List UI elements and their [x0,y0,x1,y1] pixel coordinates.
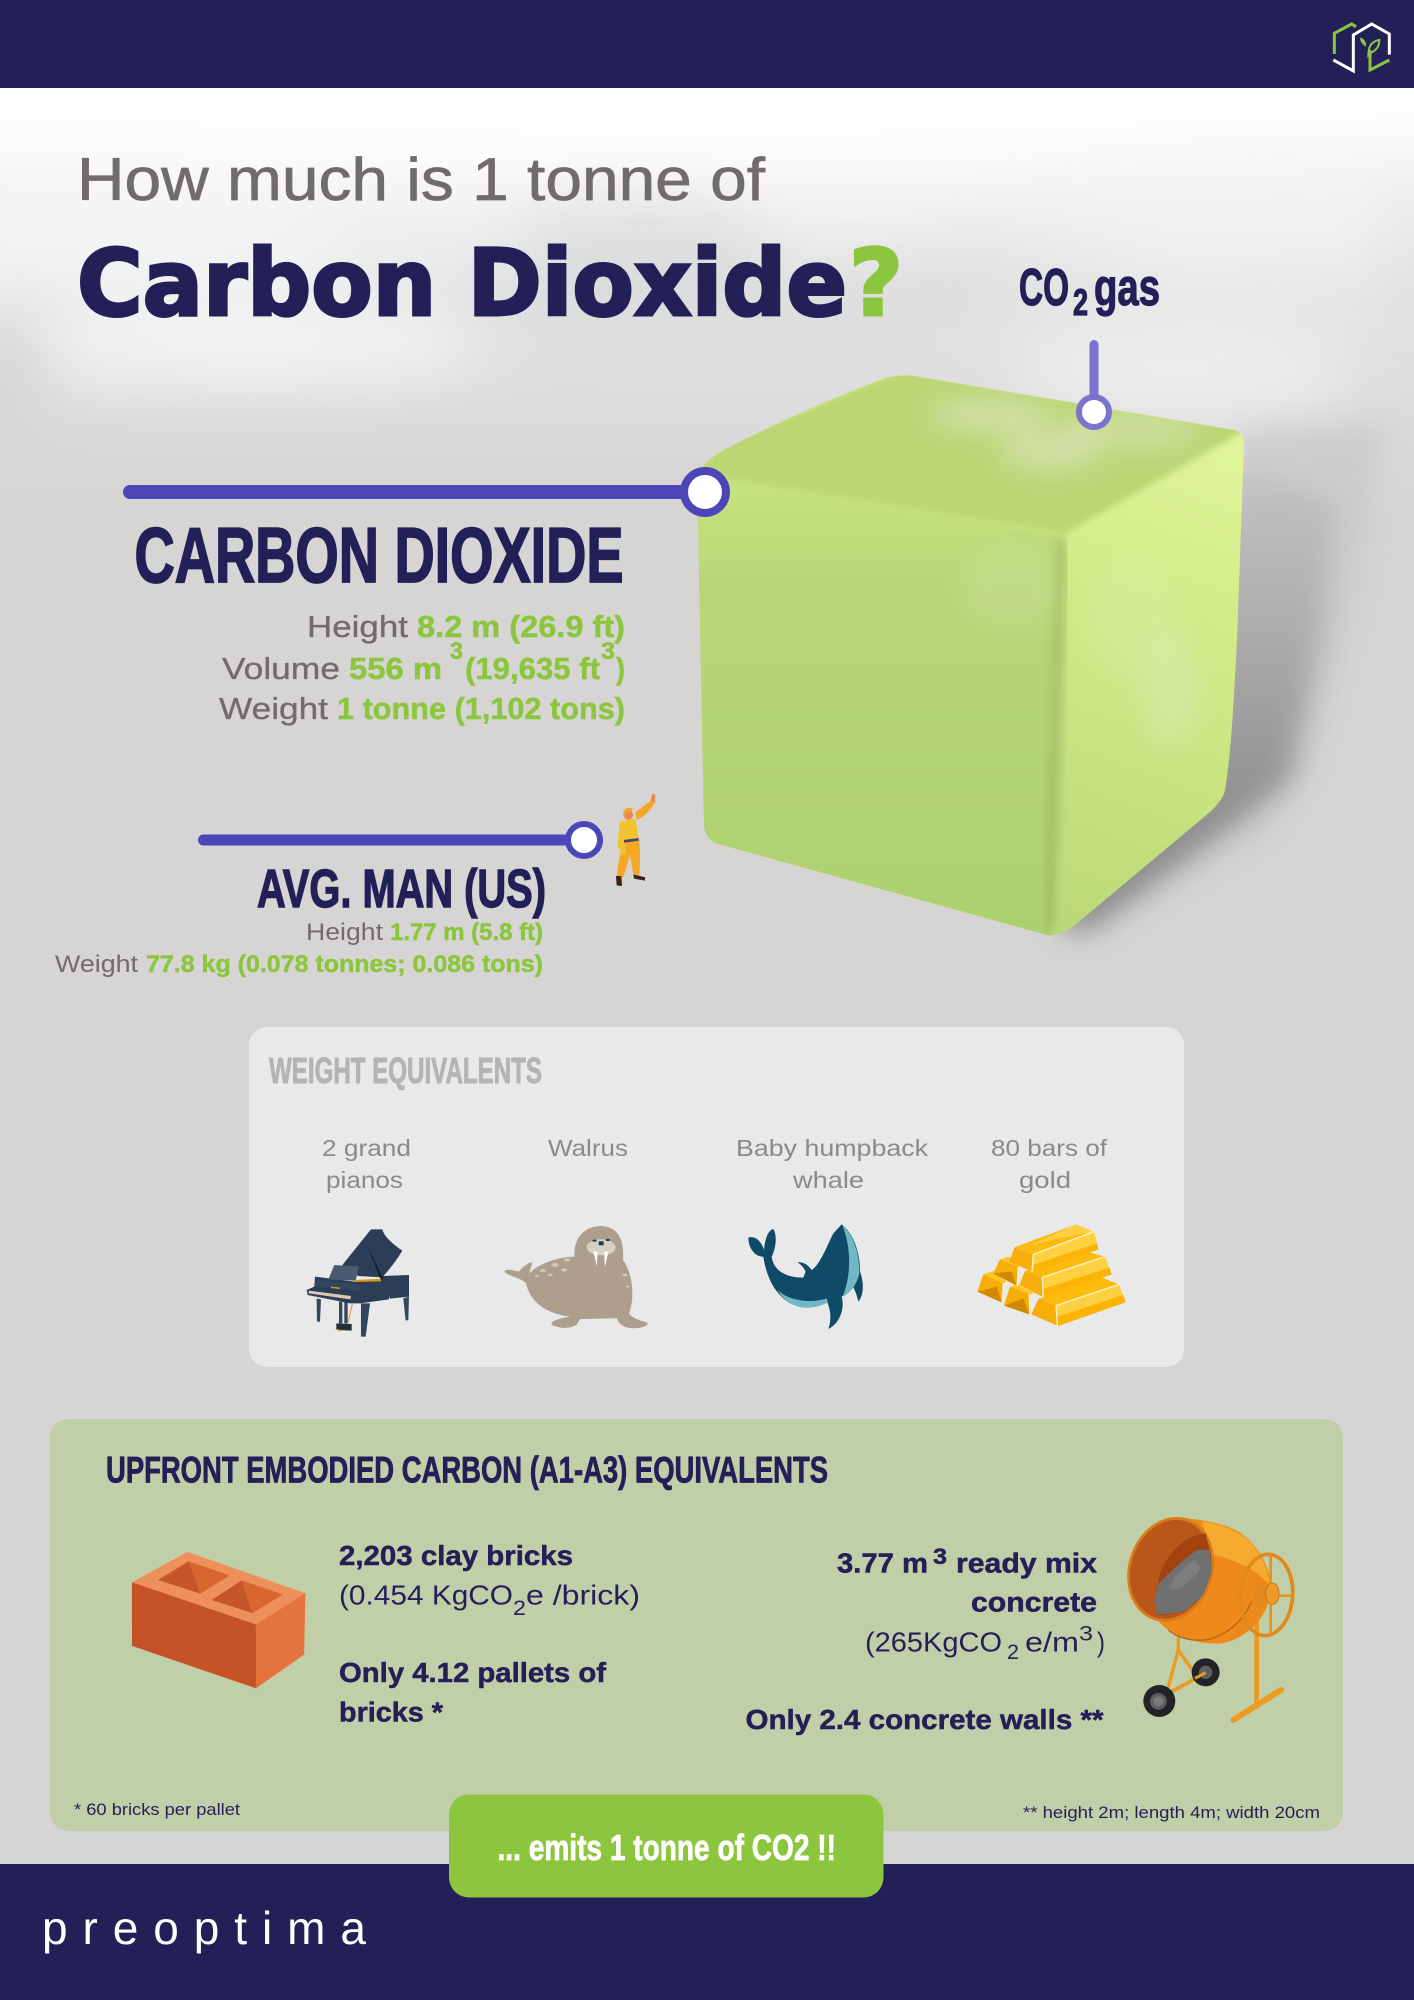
text: clay bricks: 2,203 clay bricks [339,1540,573,1571]
carbon dioxide statistics: 3 [450,638,463,665]
pointer: CO2 gas [1079,340,1109,427]
label: 80 bars of gold: gold [1019,1167,1071,1193]
cube shadow [1060,425,1385,935]
label: CO2 gas: CO [1019,259,1069,317]
cube: front edge [1048,540,1063,930]
top header bar [0,0,1414,88]
text: ready mix concrete: 2 [1007,1641,1019,1664]
pointer: average man height [198,824,600,856]
label: 80 bars of gold [991,1135,1108,1193]
text: ready mix concrete: 3 [933,1544,947,1569]
text: clay bricks [339,1540,640,1728]
text: clay bricks: 2 [513,1597,526,1620]
carbon dioxide statistics: 556 m [349,651,442,686]
panel: upfront embodied carbon equivalents [50,1419,1343,1831]
label: CO2 gas: gas [1094,259,1160,317]
text: clay bricks: e /brick) [526,1580,640,1610]
footnote: wall dimensions: ** height 2m; length 4m; width 20cm [1023,1803,1320,1822]
icon: concrete mixer [1114,1506,1295,1720]
text: ready mix concrete: 3.77 m [837,1548,928,1578]
label: walrus: Walrus [548,1135,628,1161]
footer bar [0,1864,1414,2000]
logo: preoptima wordmark: preoptima [42,1902,366,1954]
average man statistics: 77.8 kg (0.078 tonnes; 0.086 tons) [146,951,543,978]
carbon dioxide statistics: (19,635 ft [465,651,600,686]
carbon dioxide statistics: ) [616,651,625,686]
text: ready mix concrete: ready mix [956,1548,1097,1578]
text: ready mix concrete [746,1544,1105,1735]
label: 2 grand pianos: 2 grand [322,1135,411,1161]
average man statistics: 1.77 m (5.8 ft) [390,919,543,946]
text: ready mix concrete: 3 [1079,1622,1093,1646]
carbon dioxide statistics: Weight [219,691,328,726]
title: How much is 1 tonne of [77,146,765,213]
heading: upfront embodied carbon: UPFRONT EMBODIED CARBON (A1-A3) EQUIVALENTS [106,1450,828,1490]
icon: preoptima logo mark [1333,24,1389,71]
cube: top face [690,370,1250,534]
text: clay bricks: bricks * [339,1696,443,1728]
text: clay bricks: (0.454 KgCO [339,1580,513,1610]
heading: weight equivalents: WEIGHT EQUIVALENTS [269,1050,542,1091]
label: baby humpback whale [736,1135,929,1193]
label: 80 bars of gold: 80 bars of [991,1135,1108,1161]
pointer: carbon dioxide height [123,471,726,513]
label: CO2 gas [1019,259,1160,323]
label: 2 grand pianos: pianos [326,1167,403,1193]
cube: left face [690,472,1064,950]
average man statistics [55,919,543,978]
label: baby humpback whale: whale [792,1167,864,1193]
text: clay bricks: Only 4.12 pallets of [339,1657,607,1688]
icon: gold bars [977,1224,1126,1326]
text: ready mix concrete: Only 2.4 concrete walls ** [746,1704,1104,1735]
label: baby humpback whale: Baby humpback [736,1135,929,1161]
callout: emits 1 tonne of CO2 [449,1794,884,1898]
heading: CARBON DIOXIDE: CARBON DIOXIDE [134,511,624,599]
carbon dioxide statistics: 1 tonne (1,102 tons) [337,691,625,726]
cube: smoke highlights [930,399,1200,750]
title: Carbon Dioxide [77,230,847,337]
heading: AVG. MAN (US): AVG. MAN (US) [257,859,546,919]
carbon dioxide statistics [219,609,625,726]
icon: clay brick [132,1552,305,1688]
text: ready mix concrete: e/m [1025,1626,1079,1658]
carbon dioxide statistics: 3 [601,638,615,665]
icon: man [616,794,655,886]
CO2 cube [698,375,1244,936]
icon: grand piano [307,1229,409,1337]
average man statistics: Weight [55,951,138,978]
title: ? [849,230,903,337]
carbon dioxide statistics: Height [307,609,408,644]
carbon dioxide statistics: 8.2 m (26.9 ft) [417,609,625,644]
text: ready mix concrete: concrete [971,1586,1097,1618]
panel: weight equivalents [249,1027,1184,1367]
label: 2 grand pianos [322,1135,411,1193]
text: ready mix concrete: (265KgCO [865,1626,1002,1658]
average man statistics: Height [306,919,383,946]
text: ready mix concrete: ) [1097,1626,1105,1658]
icon: humpback whale [748,1224,863,1329]
footnote: bricks per pallet: * 60 bricks per pallet [74,1800,240,1819]
label: CO2 gas: 2 [1073,282,1088,323]
title [77,146,903,337]
carbon dioxide statistics: Volume [222,651,340,686]
callout: emits 1 tonne of CO2: ... emits 1 tonne of CO2 !! [498,1827,836,1868]
icon: walrus [504,1226,648,1328]
